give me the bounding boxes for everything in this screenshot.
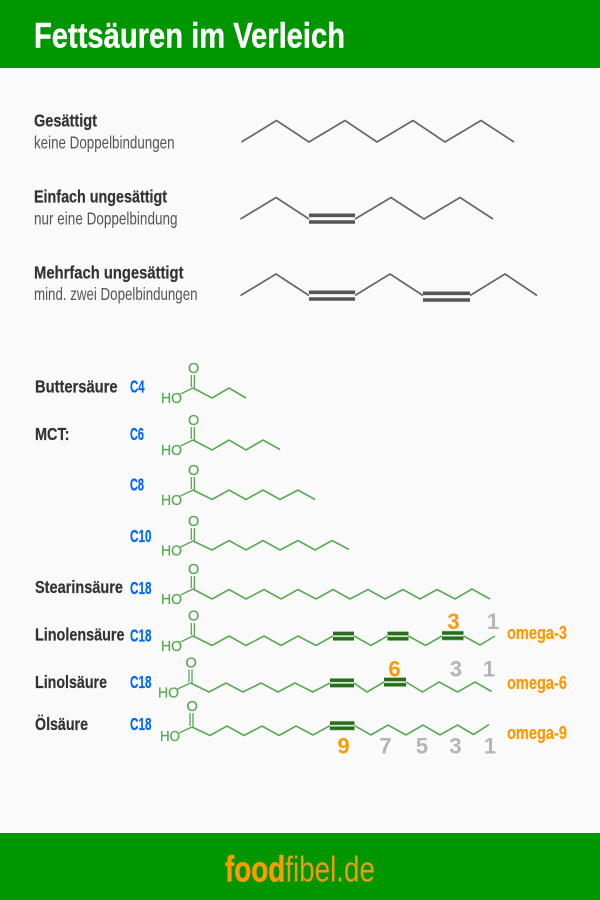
- saturated chain: [242, 120, 514, 142]
- MCT label: MCT:: [35, 424, 70, 444]
- monounsaturated chain: [240, 198, 493, 222]
- C6 row: [130, 413, 280, 459]
- Linolsäure row: 3: [450, 656, 462, 682]
- Linolensäure row: 3: [447, 609, 460, 634]
- C10 row: O: [188, 514, 199, 530]
- C10 row: C10: [130, 526, 152, 546]
- Ölsäure row: O: [186, 699, 198, 715]
- Linolsäure row: 6: [388, 656, 401, 682]
- Ölsäure row: C18: [130, 714, 152, 734]
- Ölsäure row: 7: [379, 734, 392, 758]
- Ölsäure row: 9: [337, 734, 350, 758]
- C8 row: HO: [161, 493, 182, 509]
- Stearinsäure row: HO: [161, 592, 182, 608]
- polyunsaturated label: [34, 262, 198, 304]
- Linolsäure row: O: [186, 656, 197, 672]
- Linolsäure row: C18: [130, 672, 152, 692]
- monounsaturated label: nur eine Doppelbindung: [34, 208, 178, 228]
- title: Fettsäuren im Verleich: [34, 16, 345, 56]
- Linolensäure row: HO: [161, 639, 182, 655]
- monounsaturated label: Einfach ungesättigt: [34, 186, 167, 206]
- Stearinsäure row: Stearinsäure: [35, 577, 123, 597]
- Stearinsäure row: O: [188, 562, 199, 578]
- Ölsäure row: 5: [416, 734, 428, 758]
- Buttersäure row: HO: [161, 391, 182, 407]
- Linolensäure row: Linolensäure: [35, 624, 125, 644]
- Linolsäure row: HO: [158, 686, 179, 702]
- Linolsäure row: omega-6: [507, 673, 567, 693]
- Buttersäure row: O: [188, 361, 199, 377]
- Ölsäure row: omega-9: [507, 723, 567, 743]
- C10 row: HO: [161, 544, 182, 560]
- Buttersäure row: [35, 361, 246, 407]
- Linolensäure row: [35, 608, 567, 655]
- Ölsäure row: 1: [484, 734, 496, 758]
- Stearinsäure row: [35, 562, 490, 608]
- C6 row: O: [188, 413, 199, 429]
- Linolensäure row: C18: [130, 626, 152, 646]
- brand wordmark: foodfibel.de: [225, 848, 375, 890]
- panel: bond types: [34, 110, 537, 304]
- polyunsaturated label: mind. zwei Dopelbindungen: [34, 284, 198, 304]
- Ölsäure row: [35, 699, 567, 758]
- C8 row: C8: [130, 474, 144, 494]
- saturated label: [34, 110, 174, 152]
- Ölsäure row: 3: [449, 734, 462, 758]
- Ölsäure row: Ölsäure: [35, 714, 88, 734]
- polyunsaturated label: Mehrfach ungesättigt: [34, 262, 184, 282]
- panel: fatty acid comparison: [35, 361, 567, 758]
- Linolensäure row: 1: [487, 609, 499, 634]
- header: [0, 0, 600, 68]
- Stearinsäure row: C18: [130, 578, 152, 598]
- Buttersäure row: C4: [130, 376, 145, 396]
- Linolensäure row: O: [188, 608, 199, 624]
- Linolsäure row: Linolsäure: [35, 672, 107, 692]
- C6 row: HO: [161, 443, 182, 459]
- Linolensäure row: omega-3: [507, 623, 567, 643]
- Buttersäure row: Buttersäure: [35, 376, 118, 396]
- C6 row: C6: [130, 424, 144, 444]
- C8 row: O: [188, 463, 199, 479]
- Linolsäure row: 1: [483, 656, 495, 682]
- saturated label: keine Doppelbindungen: [34, 132, 174, 152]
- Ölsäure row: HO: [160, 729, 180, 745]
- monounsaturated label: [34, 186, 178, 228]
- footer: [0, 833, 600, 900]
- C8 row: [130, 463, 315, 509]
- polyunsaturated chain: [240, 274, 537, 300]
- Linolsäure row: [35, 656, 567, 702]
- saturated label: Gesättigt: [34, 110, 97, 130]
- C10 row: [130, 514, 349, 560]
